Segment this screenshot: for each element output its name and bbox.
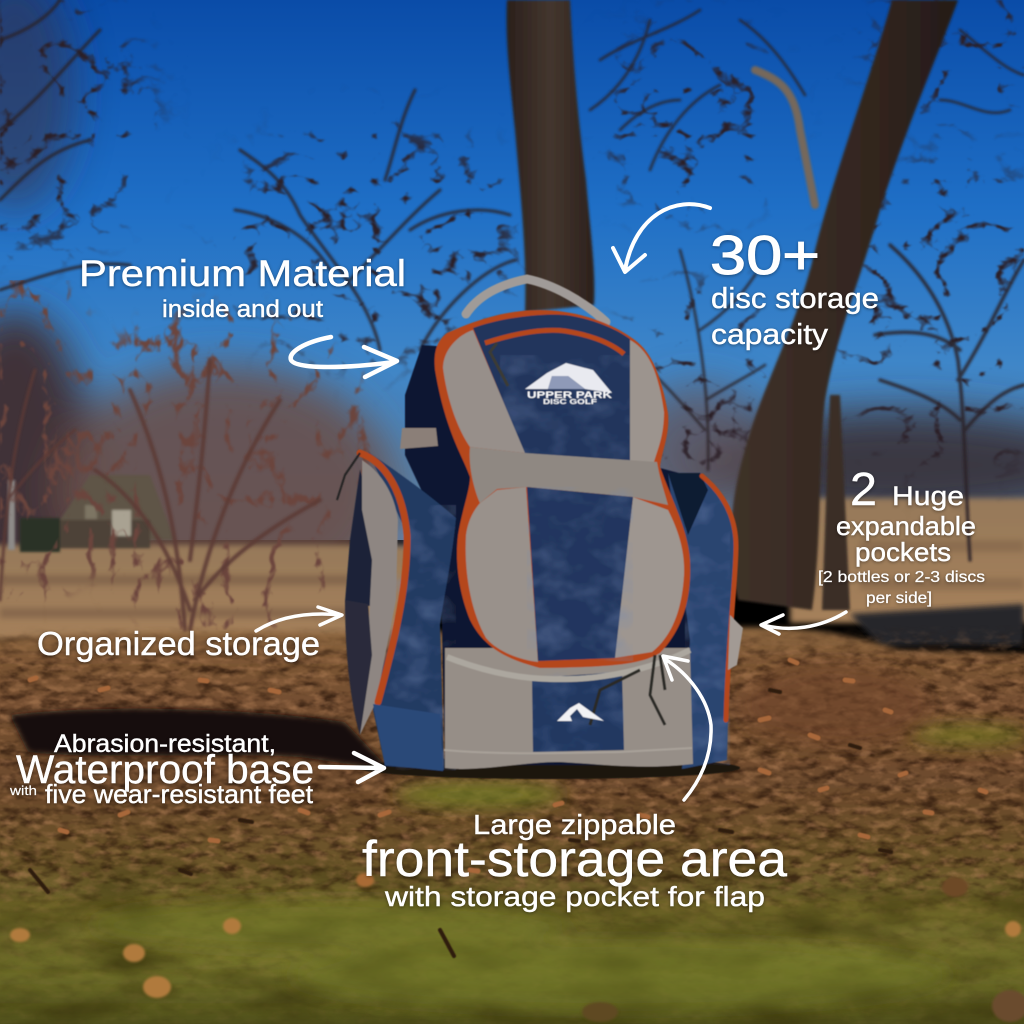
upper right grey panel xyxy=(630,340,664,462)
centre tree trunk xyxy=(507,0,594,312)
arrow xyxy=(291,337,397,377)
arrow xyxy=(761,612,846,634)
logo mountain shadow xyxy=(548,376,585,389)
main front orange outline xyxy=(435,310,690,668)
note line 1: [2 bottles or 2-3 discs xyxy=(818,569,985,586)
left pocket grey gusset xyxy=(360,460,398,735)
left side pocket xyxy=(337,452,456,771)
big number: 2 xyxy=(850,463,877,515)
right pocket dark shade xyxy=(668,473,708,535)
description line 1: disc storage xyxy=(711,283,879,315)
handle xyxy=(466,279,606,322)
small lower mountain logo xyxy=(557,703,604,721)
logo wordmark line 1: UPPER PARK xyxy=(527,390,613,400)
left bottle mesh pocket xyxy=(345,600,372,735)
foreground blurred leaves xyxy=(10,873,1024,1022)
lower navy strip xyxy=(532,672,624,752)
maroon bush twigs xyxy=(0,280,400,630)
horizontal grey band xyxy=(470,447,668,505)
lawn texture xyxy=(0,628,1024,989)
subtext: inside and out xyxy=(162,296,323,323)
middle navy panel xyxy=(527,487,633,661)
brand logo: mountain and wordmark xyxy=(525,363,613,406)
lower pocket grey zip band xyxy=(447,650,690,679)
arrow xyxy=(613,204,710,272)
left pocket navy panel xyxy=(368,452,456,770)
left bottom panel xyxy=(373,704,443,771)
lower mesh texture xyxy=(532,672,624,752)
callout: disc capacity xyxy=(613,204,879,351)
note line 2: per side] xyxy=(866,590,932,607)
front zipper pulls xyxy=(590,655,665,725)
lawn xyxy=(0,627,1024,1024)
label: Organized storage xyxy=(37,625,320,662)
right leaf pile xyxy=(740,663,930,747)
arrow xyxy=(663,656,711,800)
middle mesh texture xyxy=(527,487,633,661)
logo wordmark line 2: DISC GOLF xyxy=(543,399,598,406)
right side pocket xyxy=(668,473,743,769)
arrow xyxy=(320,753,384,782)
right pocket orange zipper xyxy=(702,476,736,720)
main line: front-storage area xyxy=(362,831,787,887)
upper left grey panel xyxy=(443,330,525,453)
backpack photo xyxy=(337,279,743,779)
middle left grey panel xyxy=(466,487,538,662)
maroon bush stems xyxy=(0,360,320,630)
green lawn mottling xyxy=(0,840,1024,1024)
right mesh pocket edge xyxy=(728,615,743,670)
heading word: Huge xyxy=(892,481,964,511)
upper navy panel xyxy=(473,315,630,464)
upper mesh texture xyxy=(500,355,630,464)
callout: organized storage xyxy=(37,607,342,662)
callout: premium material xyxy=(79,253,406,377)
distant tree line xyxy=(0,0,1024,615)
bottom line: with storage pocket for flap xyxy=(384,881,765,912)
post behind trunk xyxy=(822,395,850,610)
left pocket mesh texture xyxy=(385,505,456,770)
heading line 3: pockets xyxy=(855,537,951,567)
road at right xyxy=(850,604,1024,646)
heading: Premium Material xyxy=(79,253,406,294)
bare branches xyxy=(0,0,1024,560)
right pocket mesh texture xyxy=(685,500,730,765)
green moss patches xyxy=(90,725,1024,1011)
top zipper pull xyxy=(490,343,508,386)
house xyxy=(8,475,175,552)
arrow xyxy=(256,607,342,631)
rear dark body xyxy=(405,345,705,765)
callout: front storage xyxy=(362,656,787,912)
sky xyxy=(0,0,1024,540)
top line: Abrasion-resistant, xyxy=(54,730,276,758)
right tree trunk xyxy=(731,0,958,610)
left pocket orange zipper xyxy=(360,453,407,702)
left pocket dark outer side xyxy=(345,470,375,606)
lower front panel xyxy=(445,648,693,769)
bottom line: five wear-resistant feet xyxy=(45,779,314,809)
callout: expandable pockets xyxy=(761,463,985,634)
base seam xyxy=(444,748,692,753)
left zipper pull cord xyxy=(337,453,360,500)
far field xyxy=(0,545,410,640)
top line: Large zippable xyxy=(473,809,676,840)
top pocket orange zipper xyxy=(485,330,624,354)
heading line 2: expandable xyxy=(836,511,976,541)
logo mountain xyxy=(525,363,612,393)
right pocket navy panel xyxy=(668,473,737,769)
contact shadow xyxy=(360,757,740,779)
backpack ground shadow xyxy=(10,709,390,770)
with: with xyxy=(9,783,37,798)
field shade bands xyxy=(0,540,1024,618)
far field right xyxy=(790,498,1024,623)
middle right grey panel xyxy=(614,497,684,658)
big number: 30+ xyxy=(710,224,820,286)
pale limb beside right trunk xyxy=(755,70,815,205)
side strap tab xyxy=(400,428,438,449)
twig texture over sky xyxy=(0,0,1024,520)
description line 2: capacity xyxy=(711,319,829,351)
fallen leaves xyxy=(30,660,986,956)
main line: Waterproof base xyxy=(16,748,314,792)
callout: waterproof base xyxy=(9,730,384,809)
